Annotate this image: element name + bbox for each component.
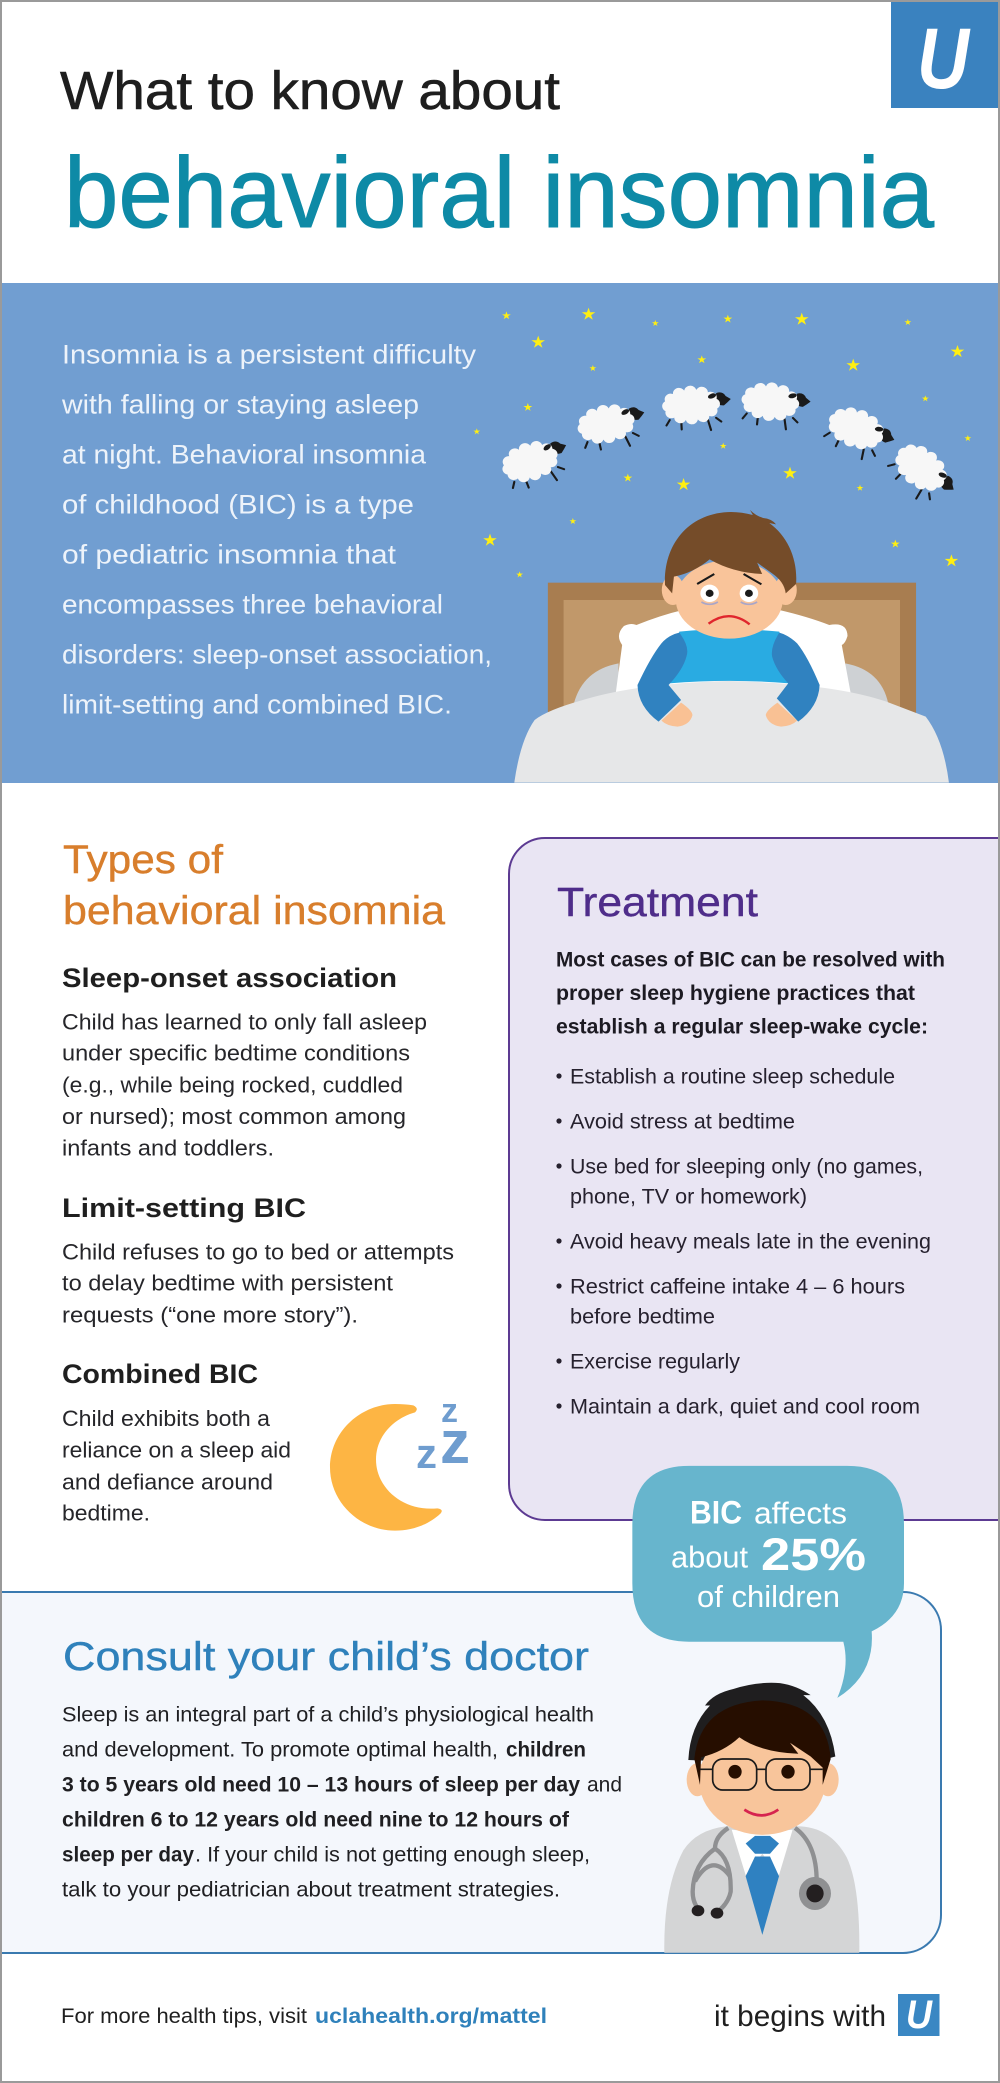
list: treatment tips: Establish a routine sleep schedule [570, 1064, 895, 1088]
panel: treatment [509, 838, 1000, 1520]
footer [61, 1993, 940, 2037]
logo: small U [898, 1993, 940, 2037]
intro text: at night. Behavioral insomnia [62, 439, 427, 469]
subheading: limit-setting BIC: Limit-setting BIC [62, 1193, 306, 1223]
header [60, 0, 1000, 249]
logo: U square [891, 0, 1000, 108]
text: treatment intro [556, 949, 945, 1038]
text: limit-setting description: to delay bedtime with persistent [62, 1271, 394, 1296]
text: health tips link: uclahealth.org/mattel [315, 2005, 547, 2028]
intro text [61, 339, 492, 719]
text: sleep-onset description [62, 1009, 427, 1160]
list: treatment tips: phone, TV or homework) [570, 1184, 807, 1208]
intro text: limit-setting and combined BIC. [62, 689, 452, 719]
icon: bed [514, 583, 949, 783]
heading: treatment: Treatment [557, 879, 759, 925]
text: consult body: Sleep is an integral part of a child’s physiological health [62, 1704, 594, 1727]
panel: intro band [0, 283, 1000, 783]
intro text: Insomnia is a persistent difficulty [62, 339, 477, 369]
text: limit-setting description: requests (“one more story”). [62, 1303, 358, 1328]
callout: speech bubble BIC affects 25%: BIC [690, 1494, 742, 1530]
text: sleep-onset description: or nursed); most common among [62, 1104, 406, 1129]
intro text: encompasses three behavioral [62, 589, 443, 619]
list: treatment tips: before bedtime [570, 1304, 715, 1328]
title line: behavioral insomnia: behavioral insomnia [64, 137, 934, 249]
callout: speech bubble BIC affects 25% [632, 1466, 904, 1698]
icon: six jumping sheep [496, 380, 965, 512]
illustration: night sky and boy in bed [473, 308, 971, 783]
text: combined description [62, 1406, 291, 1526]
icon: moon and z's: z [441, 1392, 458, 1430]
heading: types [63, 838, 446, 933]
logo: small U: U [906, 1993, 933, 2037]
intro text: of childhood (BIC) is a type [62, 489, 414, 519]
tagline: it begins with: it begins with [714, 2000, 886, 2033]
list: treatment tips: Exercise regularly [570, 1349, 740, 1373]
subheading: sleep-onset association: Sleep-onset association [62, 963, 397, 993]
panel: consult your child's doctor [0, 1592, 941, 1953]
callout: speech bubble BIC affects 25%: of children [697, 1579, 840, 1614]
list: treatment tips: Avoid heavy meals late in the evening [570, 1229, 931, 1253]
list: treatment tips: Restrict caffeine intake 4 – 6 hours [570, 1274, 905, 1298]
text: consult body: children 6 to 12 years old need nine to 12 hours of [62, 1809, 570, 1832]
callout: speech bubble BIC affects 25%: 25% [761, 1529, 866, 1580]
text: consult body: and [587, 1774, 622, 1797]
title line: what to know about: What to know about [60, 61, 560, 121]
text: sleep-onset description: Child has learned to only fall asleep [62, 1009, 427, 1034]
subheading: combined BIC: Combined BIC [62, 1359, 258, 1389]
heading: types: Types of [63, 838, 224, 882]
text: consult body: 3 to 5 years old need 10 – 13 hours of sleep per day [62, 1774, 580, 1797]
heading: consult: Consult your child’s doctor [63, 1635, 589, 1679]
text: treatment intro: proper sleep hygiene practices that [556, 982, 915, 1005]
panel: types of behavioral insomnia [62, 838, 470, 1531]
text: sleep-onset description: infants and toddlers. [62, 1135, 274, 1160]
icon: moon and z's [330, 1392, 470, 1531]
text: combined description: bedtime. [62, 1501, 150, 1526]
text: limit-setting description [62, 1239, 454, 1328]
list: treatment tips: Maintain a dark, quiet and cool room [570, 1394, 920, 1418]
text: combined description: Child exhibits both a [62, 1406, 270, 1431]
text: health tips link [61, 2005, 547, 2028]
text: sleep-onset description: (e.g., while being rocked, cuddled [62, 1073, 403, 1098]
intro text: with falling or staying asleep [61, 389, 419, 419]
text: treatment intro: Most cases of BIC can be resolved with [556, 949, 945, 972]
callout: speech bubble BIC affects 25%: affects [754, 1495, 847, 1530]
text: consult body: and development. To promote optimal health, [62, 1739, 498, 1762]
text: limit-setting description: Child refuses to go to bed or attempts [62, 1239, 454, 1264]
icon: worried boy [637, 510, 820, 727]
text: treatment intro: establish a regular sleep-wake cycle: [556, 1015, 928, 1038]
text: consult body: children [506, 1739, 586, 1762]
illustration: doctor [664, 1683, 859, 1953]
intro text: of pediatric insomnia that [62, 539, 397, 569]
callout: speech bubble BIC affects 25%: about [671, 1540, 748, 1575]
icon: stars [473, 308, 971, 577]
icon: moon and z's: z [440, 1409, 470, 1476]
text: consult body: . If your child is not getting enough sleep, [195, 1844, 590, 1867]
intro text: disorders: sleep-onset association, [62, 639, 492, 669]
text: consult body: sleep per day [62, 1844, 194, 1867]
heading: types: behavioral insomnia [63, 889, 446, 933]
text: health tips link: For more health tips, visit [61, 2005, 307, 2028]
text: sleep-onset description: under specific bedtime conditions [62, 1041, 410, 1066]
logo: U square: U [917, 11, 971, 107]
text: consult body: talk to your pediatrician about treatment strategies. [62, 1879, 560, 1902]
text: consult body [62, 1704, 622, 1902]
text: combined description: and defiance around [62, 1469, 273, 1494]
text: combined description: reliance on a sleep aid [62, 1437, 291, 1462]
list: treatment tips [556, 1064, 931, 1418]
list: treatment tips: Avoid stress at bedtime [570, 1109, 795, 1133]
icon: moon and z's: z [416, 1430, 437, 1477]
list: treatment tips: Use bed for sleeping only (no games, [570, 1154, 923, 1178]
